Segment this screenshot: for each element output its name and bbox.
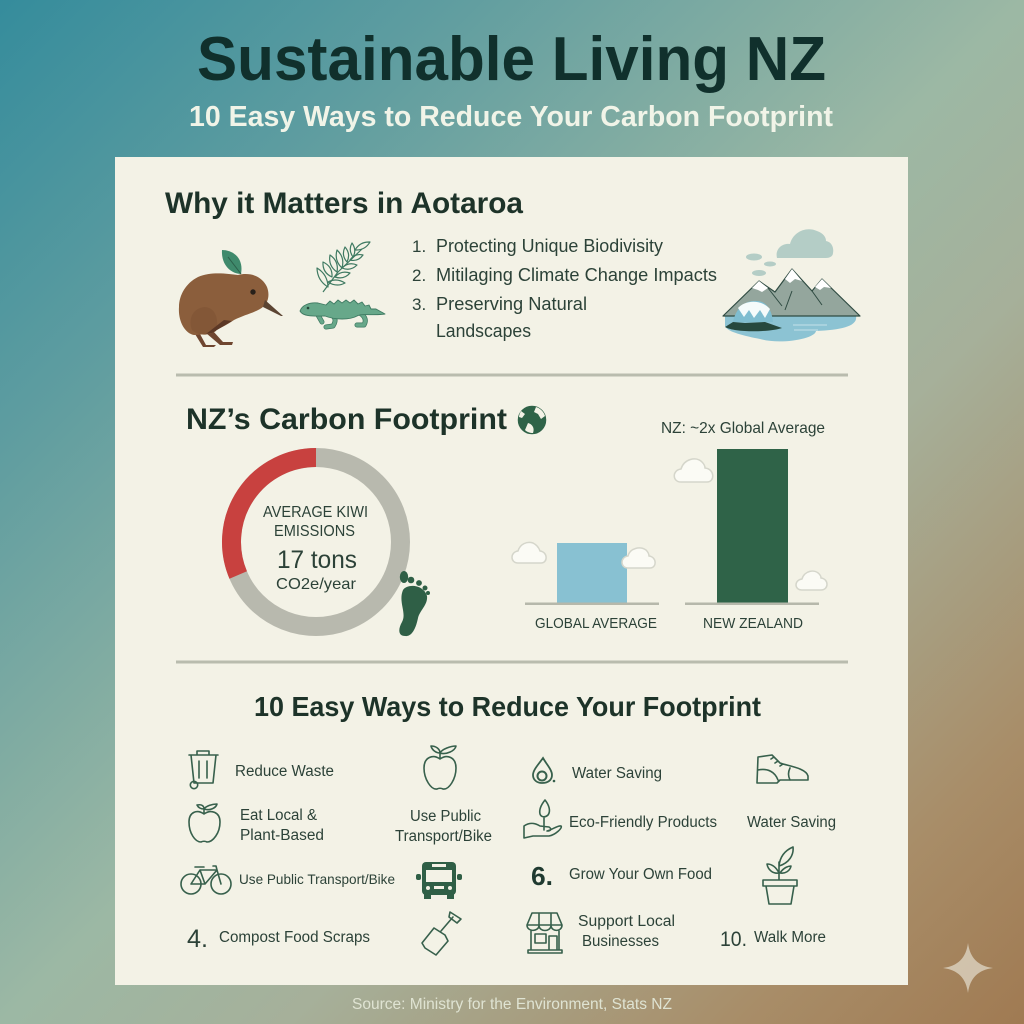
chart: donut of average kiwi emissions: [231, 458, 400, 626]
icon: local shop: [527, 913, 562, 953]
heading: carbon footprint: NZ’s Carbon Footprint: [186, 403, 507, 436]
icon: hand with seedling: [524, 800, 561, 838]
heading: 10 easy ways: 10 Easy Ways to Reduce Your Footprint: [254, 691, 761, 722]
donut centre text: 17 tons: [277, 546, 357, 574]
list: why it matters: Landscapes: [436, 321, 531, 341]
clouds: [512, 459, 827, 590]
label: eco-friendly products: Eco-Friendly Products: [569, 814, 717, 831]
icon: walking shoe: [757, 755, 808, 783]
label: water saving: Water Saving: [572, 765, 662, 782]
heading: why it matters: Why it Matters in Aotaroa: [165, 187, 523, 220]
donut centre text: EMISSIONS: [274, 523, 355, 540]
label: use public transport/bike: Use Public Transport/Bike: [239, 871, 395, 887]
subtitle: 10 Easy Ways to Reduce Your Carbon Footprint: [189, 101, 833, 133]
label: compost food scraps: Compost Food Scraps: [219, 929, 370, 946]
icon: apple: [424, 746, 456, 789]
label: use public transport/bike: [395, 808, 492, 845]
icon: bus: [416, 862, 462, 899]
list: why it matters: Preserving Natural: [436, 294, 587, 314]
bar: global average: [557, 543, 627, 603]
label: new zealand: NEW ZEALAND: [703, 615, 803, 632]
list: why it matters: 3.: [412, 295, 426, 314]
icon: potted plant: [763, 847, 797, 904]
bar chart: global vs NZ emissions: [512, 420, 827, 632]
label: support local businesses: [578, 913, 675, 950]
label: reduce waste: Reduce Waste: [235, 763, 334, 780]
icon: rubbish bin: [189, 751, 218, 789]
annotation: NZ: ~2x Global Average: [661, 420, 825, 437]
list: why it matters: Protecting Unique Biodivisity: [436, 236, 663, 256]
label: support local businesses: Support Local: [578, 913, 675, 930]
donut centre text: AVERAGE KIWI: [263, 504, 368, 521]
label: support local businesses: Businesses: [582, 933, 659, 950]
number 6: 6.: [531, 861, 553, 891]
number 10: 10.: [720, 928, 747, 951]
icon: bicycle: [181, 866, 231, 894]
list: why it matters: 1.: [412, 237, 426, 256]
bar: new zealand: [717, 449, 788, 603]
icon: footprint: [399, 571, 430, 636]
label: water saving: Water Saving: [747, 814, 836, 831]
donut centre text: CO2e/year: [276, 576, 357, 593]
panel: main card: [115, 157, 908, 985]
number 4: 4.: [187, 925, 208, 953]
label: use public transport/bike: Use Public: [410, 808, 481, 825]
icon: shovel: [422, 912, 461, 955]
icon: fern: [317, 242, 370, 292]
label: eat local and plant-based: Plant-Based: [240, 827, 324, 844]
title: Sustainable Living NZ: [197, 25, 826, 94]
label: global average: GLOBAL AVERAGE: [535, 615, 657, 632]
icon: apple: [189, 804, 220, 842]
list: why it matters: Mitilaging Climate Change Impacts: [436, 265, 717, 285]
icon: mountains and lake: [723, 229, 860, 341]
icon: sparkle: [943, 943, 993, 993]
donut centre text: [263, 504, 368, 593]
icon: kiwi bird: [179, 250, 283, 347]
label: walk more: Walk More: [754, 929, 826, 946]
icon: water drop numbered 6: [533, 758, 555, 783]
icon: globe: [518, 406, 546, 434]
list: why it matters: [412, 236, 717, 341]
label: use public transport/bike: Transport/Bike: [395, 828, 492, 845]
list: why it matters: 2.: [412, 266, 426, 285]
label: grow your own food: Grow Your Own Food: [569, 866, 712, 883]
label: eat local and plant-based: Eat Local &: [240, 807, 318, 824]
icon: tuatara lizard: [300, 300, 385, 327]
source line: Source: Ministry for the Environment, Stats NZ: [352, 996, 672, 1013]
label: eat local and plant-based: [240, 807, 324, 844]
